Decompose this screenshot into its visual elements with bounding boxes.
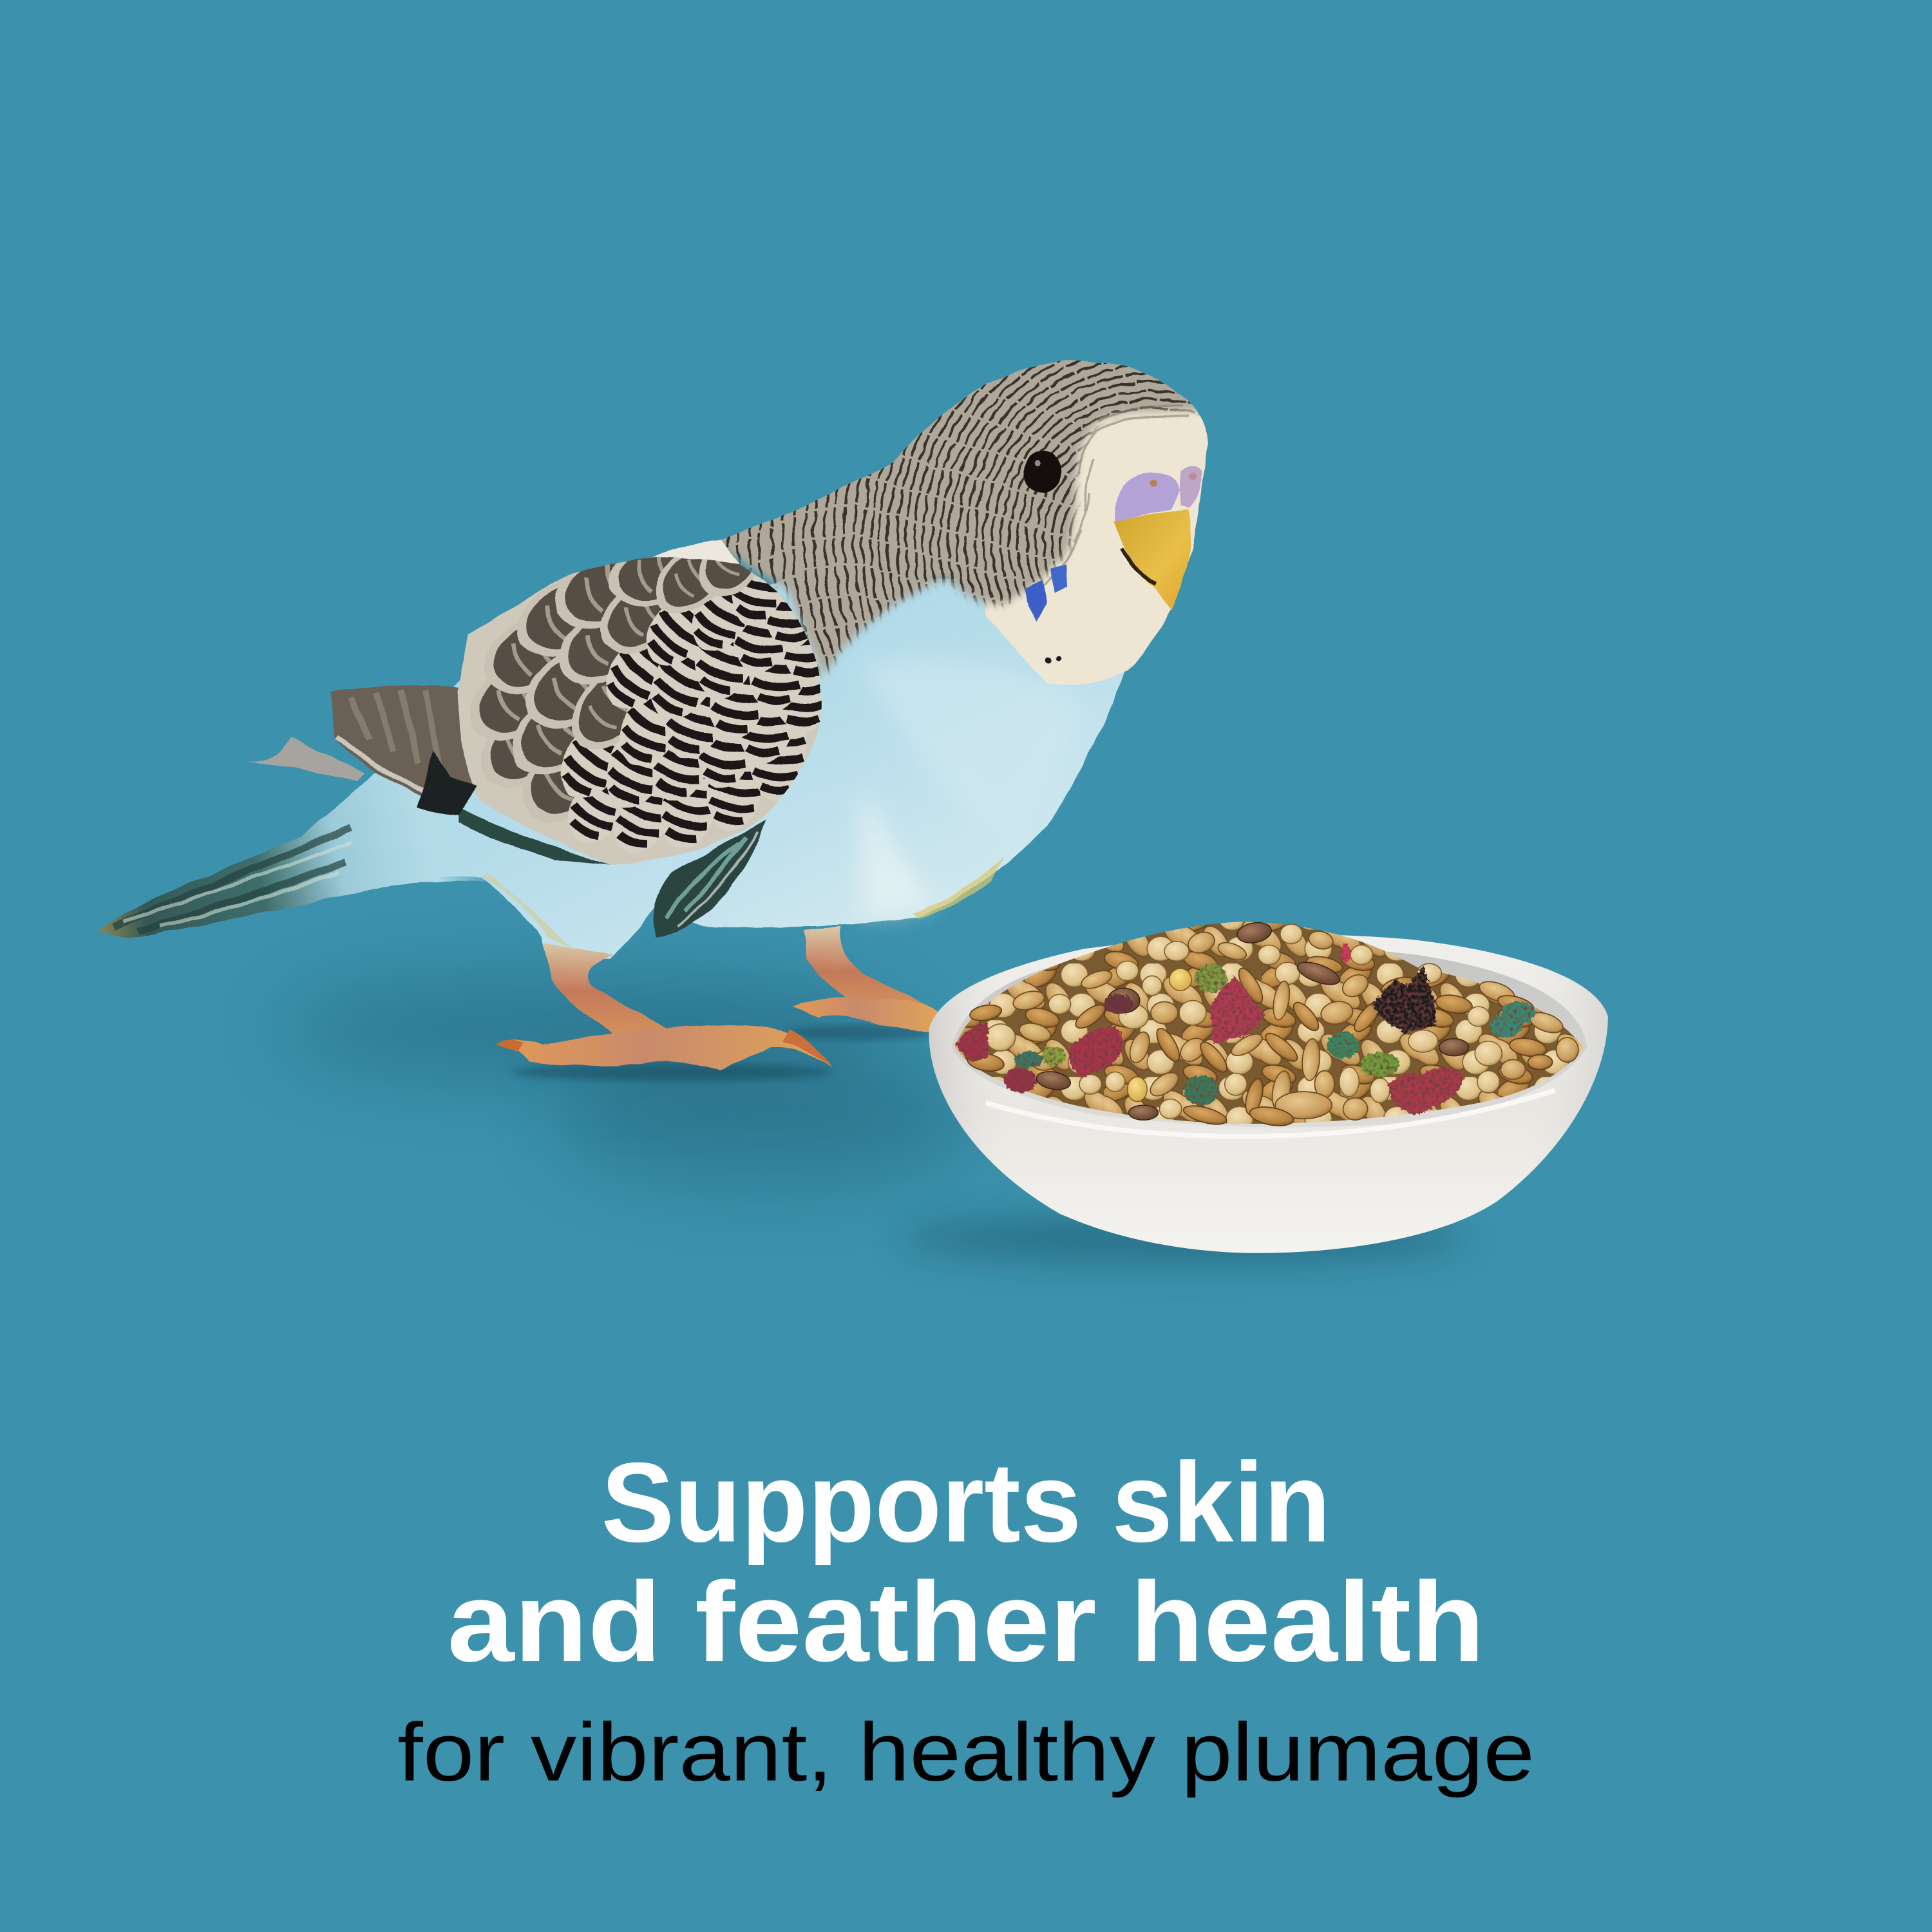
wing underside stripe	[459, 807, 610, 865]
headline	[448, 1439, 1484, 1685]
subheading: for vibrant, healthy plumage	[397, 1707, 1535, 1799]
face: fine bars fading into cream	[1032, 406, 1189, 594]
body: pale blue	[277, 579, 1128, 961]
tail base dark marking	[417, 752, 478, 816]
bowl	[929, 920, 1608, 1253]
eye	[1023, 451, 1061, 493]
headline: and feather health	[448, 1559, 1484, 1685]
neck and crown: grey barring	[721, 360, 1200, 679]
beak	[1114, 509, 1191, 610]
seed mound: red pellets	[956, 944, 1464, 1115]
bowl: outer body	[929, 934, 1608, 1253]
flight feather	[653, 819, 766, 936]
bird	[98, 360, 1208, 1070]
wing	[457, 540, 822, 866]
seed mound: dark nori piece	[1371, 966, 1435, 1032]
bowl: rim highlight	[986, 1090, 1555, 1137]
cere: lilac	[1115, 466, 1202, 522]
bowl: inner rim	[951, 945, 1587, 1128]
belly highlights	[480, 658, 1084, 949]
wing: shoulder patch	[653, 540, 739, 564]
bowl: side shading	[929, 934, 1608, 1253]
wing: overlapping feathers	[470, 556, 822, 848]
head base: cream	[986, 361, 1208, 685]
seed mound: green pellets	[1016, 963, 1535, 1105]
left leg	[495, 943, 833, 1070]
right leg	[792, 927, 939, 1032]
headline: Supports skin	[601, 1439, 1331, 1566]
seed mound	[955, 920, 1584, 1129]
tail feathers: brown upper	[244, 685, 475, 799]
cheek spots: blue	[1025, 564, 1067, 663]
floor shadows	[283, 977, 1466, 1263]
lower tail: teal streaks	[99, 779, 493, 939]
